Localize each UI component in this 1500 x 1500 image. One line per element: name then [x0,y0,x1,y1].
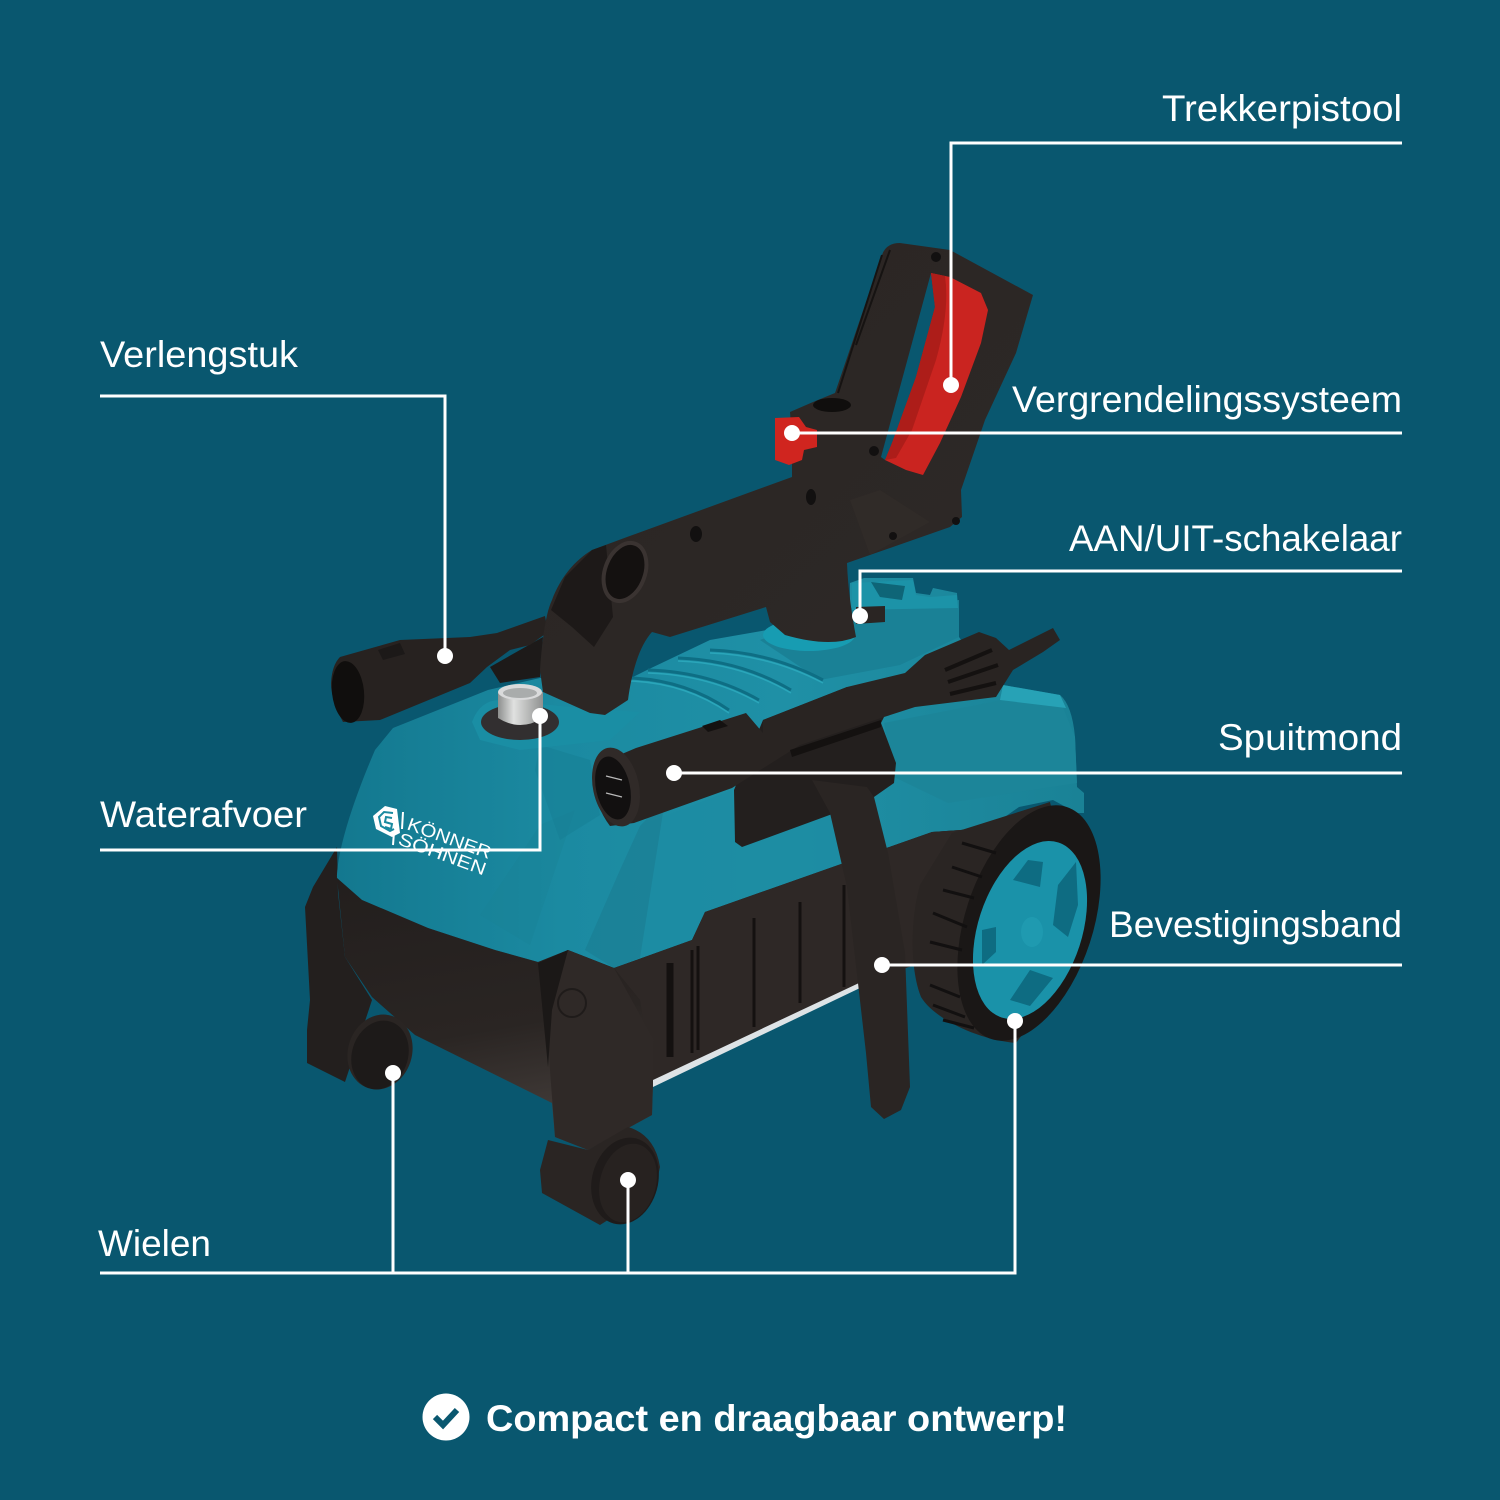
label: Wielen: Wielen [98,1223,211,1264]
machine body [337,578,1084,968]
right base panel [614,828,989,1082]
leader: Trekkerpistool [943,143,1402,393]
silver strip [653,983,860,1087]
body facets [472,580,1077,968]
grip panel [850,490,930,555]
leader: Spuitmond [666,765,1402,781]
rear caster wheel [338,1006,422,1098]
water drain connector [481,684,559,740]
front caster wheel [540,1127,668,1232]
red locking clip [775,417,817,465]
black base and feet [337,828,989,1150]
label: Verlengstuk: Verlengstuk [100,334,298,375]
leader: Wielen [100,1013,1023,1273]
label: Bevestigingsband: Bevestigingsband [1109,904,1402,945]
footer callout [422,1394,1067,1440]
handle pipe and gun grip [540,243,1033,715]
leader: Vergrendelingssysteem [784,425,1402,441]
leader: AAN/UIT-schakelaar [852,571,1402,624]
red trigger [885,273,988,475]
screw holes [690,252,960,542]
label: Spuitmond: Spuitmond [1218,717,1402,758]
tower hole [813,398,851,412]
pressure washer product illustration [305,243,1128,1232]
leader: Bevestigingsband [874,957,1402,973]
label: Waterafvoer: Waterafvoer [100,794,307,835]
wheel [913,787,1128,1059]
arch opening [551,545,613,647]
footer text: Compact en draagbaar ontwerp! [486,1398,1067,1439]
brand logo: KÖNNER [405,814,494,863]
rear extension lance [329,616,548,725]
label: Vergrendelingssysteem: Vergrendelingssysteem [1012,379,1402,420]
window gap [881,273,935,460]
rear leg [305,847,372,1082]
spray lance [585,628,1060,847]
icon: check badge [422,1394,470,1440]
lance body [595,628,1060,826]
fastening strap [812,780,910,1119]
hanging bracket [734,687,896,847]
front leg [548,950,654,1150]
brand logo: SÖHNEN [396,829,489,879]
label: AAN/UIT-schakelaar: AAN/UIT-schakelaar [1069,518,1402,559]
brand logo [373,806,494,879]
leader: Verlengstuk [100,396,453,664]
label: Trekkerpistool: Trekkerpistool [1162,88,1402,129]
leader: Waterafvoer [100,708,548,850]
